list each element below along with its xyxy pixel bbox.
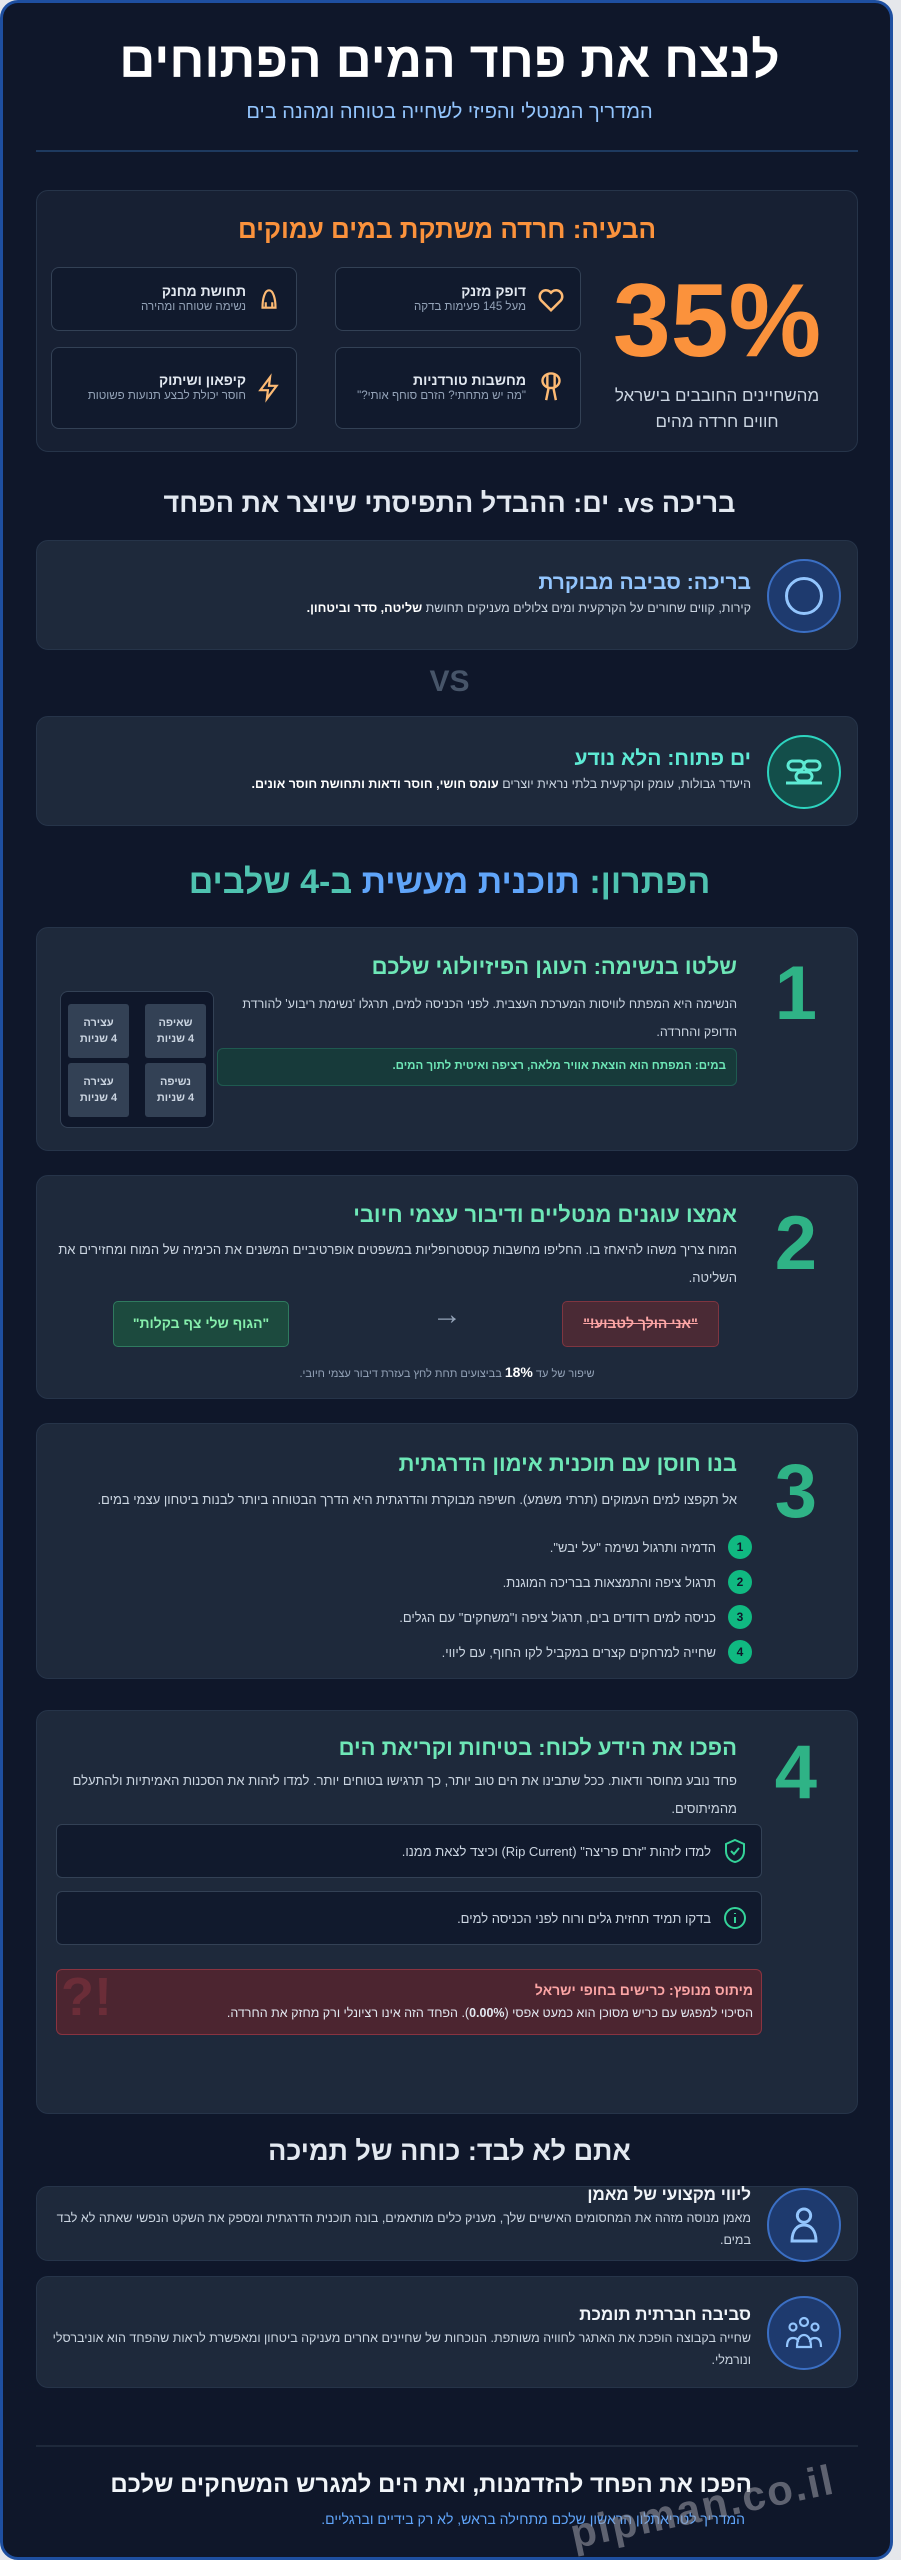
panel: step 3: 3 — [737, 1610, 743, 1624]
group text: שחייה בקבוצה הופכת את האתגר לחוויה משותפת. הנוכחות של שחיינים אחרים מעניקה ביטחון ומאפשרת לראות שהפחד הוא אוניברסלי ונורמלי. — [53, 2331, 751, 2367]
myth callout: מיתוס מנופץ: כרישים בחופי ישראל — [535, 1982, 753, 1998]
positive phrase: "הגוף שלי צף בקלות" — [133, 1315, 269, 1331]
icon: waves — [767, 735, 841, 809]
symptom: heart rate: דופק מזנק — [461, 283, 526, 299]
symptom: choking: נשימה שטוחה ומהירה — [141, 301, 246, 313]
problem heading: הבעיה: חרדה משתקת במים עמוקים — [238, 214, 656, 244]
subtitle: המדריך המנטלי והפיזי לשחייה בטוחה ומהנה בים — [246, 101, 653, 123]
step 4 title: הפכו את הידע לכוח: בטיחות וקריאת הים — [339, 1735, 737, 1760]
panel: step 3 — [36, 1423, 858, 1679]
heading: pool vs sea: בריכה vs. ים: ההבדל התפיסתי שיוצר את הפחד — [164, 488, 735, 518]
icon: group — [767, 2296, 841, 2370]
footer subtitle: המדריך לטריאתלון הראשון שלכם מתחילה בראש, לא רק בידיים וברגליים. — [321, 2511, 745, 2527]
symptom: choking: תחושת מחנק — [162, 283, 246, 299]
step 2 title: אמצו עוגנים מנטליים ודיבור עצמי חיובי — [353, 1202, 737, 1227]
breathing box diagram: 4 שניות — [157, 1033, 194, 1045]
heading: not alone: אתם לא לבד: כוחה של תמיכה — [268, 2136, 631, 2166]
myth callout — [56, 1969, 762, 2035]
panel: problem — [36, 190, 858, 452]
panel: step 3: תרגול ציפה והתמצאות בבריכה המוגנת. — [503, 1574, 716, 1590]
group text: סביבה חברתית תומכת — [579, 2305, 751, 2324]
symptom: heart rate — [335, 267, 581, 331]
symptom: freeze — [51, 347, 297, 429]
icon: pool circle — [767, 559, 841, 633]
breathing box diagram: 4 שניות — [157, 1092, 194, 1104]
step 4 text: פחד נובע מחוסר ודאות. ככל שתבינו את הים טוב יותר, כך תרגישו בטוחים יותר. למדו לזהות את הסכנות האמיתיות ולהתעלם מהמיתוסים. — [73, 1773, 737, 1816]
negative phrase: "אני הולך לטבוע!" — [583, 1315, 698, 1331]
sea text: ים פתוח: הלא נודע — [575, 747, 751, 770]
symptom: choking — [51, 267, 297, 331]
myth callout: הסיכוי למפגש עם כריש מסוכן הוא כמעט אפסי (0.00%). הפחד הזה אינו רציונלי ורק מחזק את החרדה. — [227, 2006, 753, 2020]
symptom: freeze: חוסר יכולת לבצע תנועות פשוטות — [88, 390, 246, 402]
negative phrase — [562, 1301, 719, 1347]
vs label: VS — [429, 665, 470, 698]
stat note: שיפור של עד 18% בביצועים תחת לחץ בעזרת דיבור עצמי חיובי. — [299, 1364, 595, 1380]
pool text: בריכה: סביבה מבוקרת — [538, 571, 751, 594]
panel: step 4 — [36, 1710, 858, 2114]
tip: rip current — [56, 1824, 762, 1878]
coach text: ליווי מקצועי של מאמן — [587, 2185, 751, 2204]
step 3 text: אל תקפצו למים העמוקים (תרתי משמע). חשיפה מבוקרת והדרגתית היא הדרך הבטוחה ביותר לבנות ביטחון עצמי במים. — [97, 1492, 737, 1507]
tip box — [217, 1048, 737, 1086]
list — [550, 1535, 752, 1559]
tip: rip current: למדו לזהות "זרם פריצה" (Rip Current) וכיצד לצאת ממנו. — [402, 1844, 711, 1858]
breathing box diagram: 4 שניות — [80, 1092, 117, 1104]
heading: solution: הפתרון: תוכנית מעשית ב-4 שלבים — [189, 863, 710, 901]
stat 35%: 35% — [613, 263, 821, 379]
pool text: קירות, קווים שחורים על הקרקעית ומים צלולים מעניקים תחושת שליטה, סדר וביטחון. — [307, 601, 751, 615]
tip: forecast — [56, 1891, 762, 1945]
symptom: thoughts — [335, 347, 581, 429]
watermark: pipman.co.il — [566, 2456, 839, 2557]
symptom: heart rate: מעל 145 פעימות בדקה — [414, 301, 526, 313]
panel: step 1 — [36, 927, 858, 1151]
step 1 title: שלטו בנשימה: העוגן הפיזיולוגי שלכם — [372, 954, 737, 979]
step 2 text: המוח צריך משהו להיאחז בו. החליפו מחשבות קטסטרופליות במשפטים אופרטיביים המשנים את הכימיה של המוח ומחזירים את השליטה. — [58, 1242, 737, 1285]
coach text — [56, 2185, 751, 2247]
positive phrase — [113, 1301, 289, 1347]
panel: step 3: כניסה למים רדודים בים, תרגול ציפה ו"משחקים" עם הגלים. — [399, 1610, 716, 1624]
panel: step 3: 2 — [737, 1575, 743, 1589]
panel: group — [36, 2276, 858, 2388]
step number 4: 4 — [775, 1730, 817, 1815]
panel: step 3: 4 — [737, 1645, 743, 1659]
title: לנצח את פחד המים הפתוחים — [119, 32, 780, 88]
list: הדמיה ותרגול נשימה "על יבש". — [550, 1540, 716, 1554]
coach text: מאמן מנוסה מזהה את המחסומים האישיים שלך, מעניק כלים מותאמים, בונה תוכנית הדרגתית ומספק את השקט הנפשי שאתה לא לבד במים. — [57, 2211, 751, 2247]
tip: forecast: בדקו תמיד תחזית גלים ורוח לפני הכניסה למים. — [457, 1910, 711, 1926]
step 1 text: הנשימה היא המפתח לוויסות המערכת העצבית. לפני הכניסה למים, תרגלו 'נשימת ריבוע' להורדת הדופק והחרדה. — [242, 997, 737, 1039]
step number 1: 1 — [775, 951, 817, 1036]
breathing box diagram: 4 שניות — [80, 1033, 117, 1045]
panel: pool — [36, 540, 858, 650]
breathing box diagram — [60, 991, 214, 1128]
panel: sea — [36, 716, 858, 826]
breathing box diagram: נשיפה — [160, 1076, 191, 1088]
list: 1 — [737, 1540, 743, 1554]
sea text — [252, 747, 751, 791]
symptom: thoughts: מחשבות טורדניות — [413, 372, 526, 388]
breathing box diagram: עצירה — [83, 1017, 114, 1029]
arrow: → — [432, 1298, 462, 1331]
step number 2: 2 — [775, 1201, 817, 1286]
panel: step 2 — [36, 1175, 858, 1399]
step number 3: 3 — [775, 1449, 817, 1534]
stat 35%: חווים חרדה מהים — [655, 412, 779, 431]
pool text — [307, 571, 751, 615]
footer title: הפכו את הפחד להזדמנות, ואת הים למגרש המשחקים שלכם — [110, 2471, 752, 2498]
group text — [53, 2305, 751, 2367]
symptom: freeze: קיפאון ושיתוק — [159, 372, 246, 388]
stat 35%: מהשחיינים החובבים בישראל — [615, 386, 819, 405]
panel: step 3: שחייה למרחקים קצרים במקביל לקו החוף, עם ליווי. — [442, 1644, 716, 1660]
sea text: היעדר גבולות, עומק וקרקעית בלתי נראית יוצרים עומס חושי, חוסר ודאות ותחושת חוסר אונים. — [252, 777, 751, 791]
tip box: במים: המפתח הוא הוצאת אוויר מלאה, רציפה ואיטית לתוך המים. — [392, 1060, 726, 1072]
icon: person — [767, 2188, 841, 2262]
stat 35% — [613, 263, 821, 431]
breathing box diagram: שאיפה — [158, 1017, 193, 1029]
panel: coach — [36, 2186, 858, 2261]
step 3 title: בנו חוסן עם תוכנית אימון הדרגתית — [399, 1451, 737, 1476]
breathing box diagram: עצירה — [83, 1076, 114, 1088]
symptom: thoughts: "מה יש מתחתי? הזרם סוחף אותי?" — [357, 390, 526, 402]
